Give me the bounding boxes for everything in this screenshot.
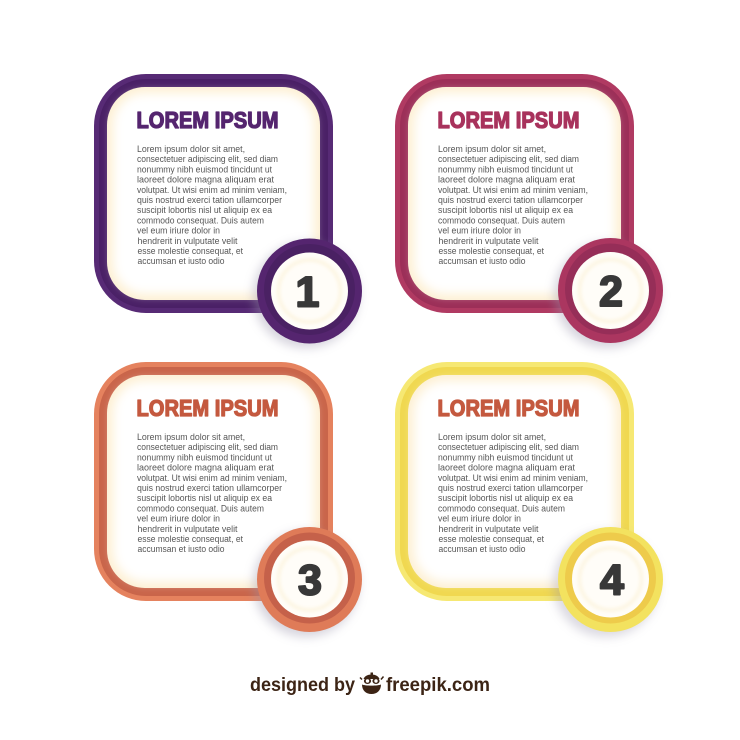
card 3 body text: volutpat. Ut wisi enim ad minim veniam,	[137, 473, 287, 483]
card 3 body text: suscipit lobortis nisl ut aliquip ex ea	[137, 493, 272, 503]
card 4 body text: vel eum iriure dolor in	[438, 514, 521, 524]
card 1 body text: volutpat. Ut wisi enim ad minim veniam,	[137, 185, 287, 195]
card 4 body text: laoreet dolore magna aliquam erat	[438, 463, 576, 473]
card 2 body text: hendrerit in vulputate velit	[438, 236, 539, 246]
card 3 body text: accumsan et iusto odio	[138, 544, 225, 554]
card 1 body text: esse molestie consequat, et	[138, 246, 244, 256]
card 2 body text: vel eum iriure dolor in	[438, 226, 521, 236]
card 4 body text: volutpat. Ut wisi enim ad minim veniam,	[438, 473, 588, 483]
footer: freepik credit	[250, 672, 490, 696]
card 4 heading: LOREM IPSUM	[438, 395, 580, 421]
card 3 heading: LOREM IPSUM	[136, 395, 278, 421]
card 1 body text: Lorem ipsum dolor sit amet,	[137, 144, 245, 154]
card 2 body text: quis nostrud exerci tation ullamcorper	[438, 195, 583, 205]
card 4 body text: quis nostrud exerci tation ullamcorper	[438, 483, 583, 493]
card 1 body text: nonummy nibh euismod tincidunt ut	[137, 164, 273, 174]
card 2 frame	[395, 74, 634, 313]
card 4 number badge: 4	[600, 556, 624, 604]
card 3 body text: nonummy nibh euismod tincidunt ut	[137, 452, 273, 462]
card 2 body text	[438, 144, 588, 266]
card 3 body text: consectetuer adipiscing elit, sed diam	[137, 442, 278, 452]
card 4 body text: esse molestie consequat, et	[438, 534, 545, 544]
card 4 body text	[438, 432, 588, 554]
card 4 body text: consectetuer adipiscing elit, sed diam	[438, 442, 579, 452]
card 1 body text: suscipit lobortis nisl ut aliquip ex ea	[137, 205, 272, 215]
card 2 body text: Lorem ipsum dolor sit amet,	[438, 144, 546, 154]
card 2 number badge: 2	[599, 268, 623, 316]
panel: card 2	[395, 74, 663, 348]
card 4 body text: suscipit lobortis nisl ut aliquip ex ea	[438, 493, 573, 503]
card 3 body text: hendrerit in vulputate velit	[138, 524, 238, 534]
card 1 body text: quis nostrud exerci tation ullamcorper	[137, 195, 282, 205]
card 4 body text: Lorem ipsum dolor sit amet,	[438, 432, 546, 442]
panel: card 1	[94, 74, 362, 348]
card 2 body text: laoreet dolore magna aliquam erat	[438, 175, 576, 185]
card 1 body text: hendrerit in vulputate velit	[138, 236, 238, 246]
panel: card 3	[94, 362, 362, 637]
card 3 body text: quis nostrud exerci tation ullamcorper	[137, 483, 282, 493]
card 2 body text: nonummy nibh euismod tincidunt ut	[438, 164, 574, 174]
panel: card 4	[395, 362, 663, 637]
card 4 body text: nonummy nibh euismod tincidunt ut	[438, 452, 574, 462]
card 3 body text	[137, 432, 287, 554]
card 1 body text	[137, 144, 287, 266]
card 2 number badge	[554, 238, 663, 348]
card 2 body text: accumsan et iusto odio	[438, 256, 526, 266]
card 4 body text: accumsan et iusto odio	[438, 544, 526, 554]
icon: freepik mascot	[360, 672, 384, 694]
card 2 body text: suscipit lobortis nisl ut aliquip ex ea	[438, 205, 573, 215]
credit text right: freepik.com	[386, 675, 490, 696]
card 1 body text: laoreet dolore magna aliquam erat	[137, 175, 275, 185]
card 1 number badge	[253, 238, 362, 348]
card 3 body text: Lorem ipsum dolor sit amet,	[137, 432, 245, 442]
card 3 body text: commodo consequat. Duis autem	[137, 503, 264, 513]
card 2 heading: LOREM IPSUM	[438, 107, 580, 133]
card 2 body text: commodo consequat. Duis autem	[438, 215, 565, 225]
card 3 body text: vel eum iriure dolor in	[137, 514, 220, 524]
card 3 body text: laoreet dolore magna aliquam erat	[137, 463, 275, 473]
card 2 body text: volutpat. Ut wisi enim ad minim veniam,	[438, 185, 588, 195]
card 2 body text: consectetuer adipiscing elit, sed diam	[438, 154, 579, 164]
card 1 body text: vel eum iriure dolor in	[137, 226, 220, 236]
card 1 body text: accumsan et iusto odio	[138, 256, 225, 266]
card 1 number badge: 1	[296, 268, 319, 316]
card 3 number badge: 3	[298, 556, 322, 604]
card 1 heading: LOREM IPSUM	[136, 107, 278, 133]
credit text left: designed by	[250, 675, 355, 696]
card 1 body text: consectetuer adipiscing elit, sed diam	[137, 154, 278, 164]
card 1 body text: commodo consequat. Duis autem	[137, 215, 264, 225]
card 3 number badge	[253, 527, 362, 637]
card 2 body text: esse molestie consequat, et	[438, 246, 545, 256]
card 4 body text: commodo consequat. Duis autem	[438, 503, 565, 513]
card 1 frame	[94, 74, 333, 313]
card 3 body text: esse molestie consequat, et	[138, 534, 244, 544]
card 4 number badge	[553, 527, 663, 637]
card 3 frame	[94, 362, 333, 601]
card 4 frame	[395, 362, 634, 601]
card 4 body text: hendrerit in vulputate velit	[438, 524, 539, 534]
